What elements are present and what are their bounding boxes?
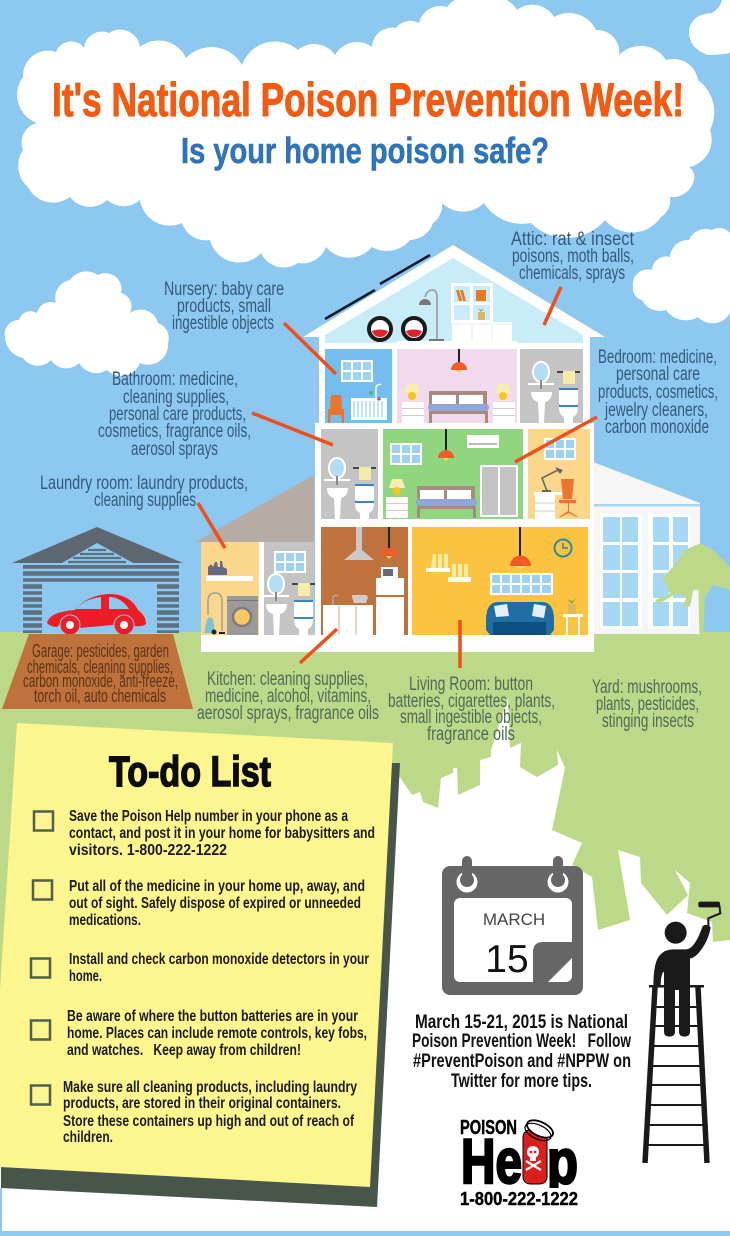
callout: nursery: Nursery: baby care <box>164 279 284 300</box>
corner cloud <box>689 0 730 55</box>
item 4: home. Places can include remote controls, key fobs, <box>67 1025 367 1042</box>
callout: bathroom: Bathroom: medicine, <box>112 369 238 390</box>
room: master bedroom <box>397 349 517 423</box>
item 1: visitors. 1-800-222-1222 <box>69 842 227 859</box>
subtitle: Is your home poison safe? <box>181 130 549 171</box>
item 2 <box>33 878 365 929</box>
item 5: Store these containers up high and out of reach of <box>63 1113 355 1130</box>
callout: nursery <box>164 279 336 374</box>
item 2: out of sight. Safely dispose of expired or unneeded <box>69 895 361 912</box>
callout: laundry room <box>40 473 248 548</box>
item 5: children. <box>63 1129 113 1146</box>
annex building left <box>195 475 315 637</box>
callout: attic: chemicals, sprays <box>519 263 625 284</box>
panel: to-do list <box>0 723 400 1207</box>
item 4: Be aware of where the button batteries are in your <box>67 1008 358 1025</box>
callout: bathroom: cleaning supplies, <box>123 387 229 408</box>
bottom strip <box>0 1231 730 1236</box>
room: study <box>528 429 590 519</box>
logo: poison help: 1-800-222-1222 <box>460 1189 578 1209</box>
header cloud <box>17 0 714 268</box>
callout: bathroom: cosmetics, fragrance oils, <box>98 421 251 442</box>
garage <box>12 527 183 635</box>
annex building right <box>593 462 700 634</box>
item 4 <box>31 1008 367 1059</box>
callout: laundry room: cleaning supplies <box>94 490 196 511</box>
callout: living room: small ingestible objects, <box>400 707 542 728</box>
house main body <box>201 245 605 652</box>
icon: calendar: MARCH <box>483 910 545 929</box>
text: campaign dates: Twitter for more tips. <box>451 1071 592 1092</box>
icon: painter on ladder <box>645 902 720 1163</box>
callout: living room: batteries, cigarettes, plants, <box>388 691 555 712</box>
room: living room <box>412 527 588 635</box>
garage driveway label: carbon monoxide, anti-freeze, <box>23 671 178 691</box>
heading: to-do list: To-do List <box>109 748 271 796</box>
item 5: Make sure all cleaning products, including laundry <box>63 1079 357 1096</box>
item 1: contact, and post it in your home for babysitters and <box>69 825 375 842</box>
callout: living room <box>388 620 555 745</box>
callout: bedroom: personal care <box>616 364 700 385</box>
item 3: Install and check carbon monoxide detectors in your <box>69 951 369 968</box>
callout: living room: Living Room: button <box>409 674 533 695</box>
laundry shelf and bottles <box>206 561 253 581</box>
room: kitchen <box>321 527 408 635</box>
logo: poison help: p <box>547 1128 578 1197</box>
item 3 <box>31 951 369 985</box>
text: campaign dates: #PreventPoison and #NPPW on <box>413 1051 631 1072</box>
room: upstairs bath <box>520 349 583 423</box>
icon: red car <box>47 594 146 635</box>
item 3: home. <box>69 968 102 985</box>
callout: attic <box>511 229 635 325</box>
callout: bathroom <box>98 369 333 460</box>
item 2: medications. <box>69 912 141 929</box>
washing machine <box>227 596 258 635</box>
callout: kitchen <box>197 629 379 724</box>
room: nursery <box>325 349 392 423</box>
garage driveway label: torch oil, auto chemicals <box>34 686 166 706</box>
item 5: products, are stored in their original containers. <box>63 1095 341 1112</box>
text: campaign dates: March 15-21, 2015 is National <box>415 1012 628 1033</box>
logo: poison help: He <box>461 1127 522 1197</box>
callout: attic: poisons, moth balls, <box>512 246 634 267</box>
item 1: Save the Poison Help number in your phone as a <box>69 808 348 825</box>
room: attic <box>325 258 583 343</box>
room: green bedroom <box>383 429 523 519</box>
icon: calendar: 15 <box>485 938 529 981</box>
callout: laundry room: Laundry room: laundry products, <box>40 473 248 494</box>
item 5 <box>31 1079 357 1146</box>
right cloud <box>633 228 730 323</box>
icon: calendar <box>442 856 583 995</box>
garage driveway label <box>2 634 193 709</box>
callout: kitchen: medicine, alcohol, vitamins, <box>205 686 371 707</box>
callout: kitchen: aerosol sprays, fragrance oils <box>197 703 379 724</box>
room: second floor bath <box>321 429 378 519</box>
roof <box>303 245 605 337</box>
callout: attic: Attic: rat & insect <box>511 229 635 250</box>
sky background <box>0 0 730 640</box>
garage driveway label: chemicals, cleaning supplies, <box>27 657 173 677</box>
left cloud <box>5 271 169 376</box>
skylight lines <box>325 255 430 319</box>
callout: kitchen: Kitchen: cleaning supplies, <box>207 669 368 690</box>
callout: bedroom <box>515 347 718 462</box>
text: campaign dates <box>412 1012 631 1092</box>
callout: nursery: products, small <box>177 296 271 317</box>
item 1 <box>34 808 375 859</box>
ground <box>0 632 730 962</box>
garage driveway label: Garage: pesticides, garden <box>32 641 169 661</box>
item 4: and watches. Keep away from children! <box>67 1042 301 1059</box>
callout: yard <box>592 677 702 732</box>
text: campaign dates: Poison Prevention Week! Follow <box>412 1031 631 1052</box>
callout: bathroom: personal care products, <box>109 404 246 425</box>
callout: nursery: ingestible objects <box>172 313 274 334</box>
icon: yard tree <box>655 543 730 633</box>
vacuum cleaner <box>204 593 225 634</box>
callout: yard: stinging insects <box>602 711 694 732</box>
white paint area <box>0 698 730 1236</box>
logo: poison help <box>460 1117 578 1209</box>
callout: bathroom: aerosol sprays <box>131 439 218 460</box>
icon: poison bottle <box>522 1117 556 1184</box>
item 2: Put all of the medicine in your home up, away, and <box>69 878 365 895</box>
callout: living room: fragrance oils <box>427 724 515 745</box>
logo: poison help: POISON <box>460 1117 517 1139</box>
